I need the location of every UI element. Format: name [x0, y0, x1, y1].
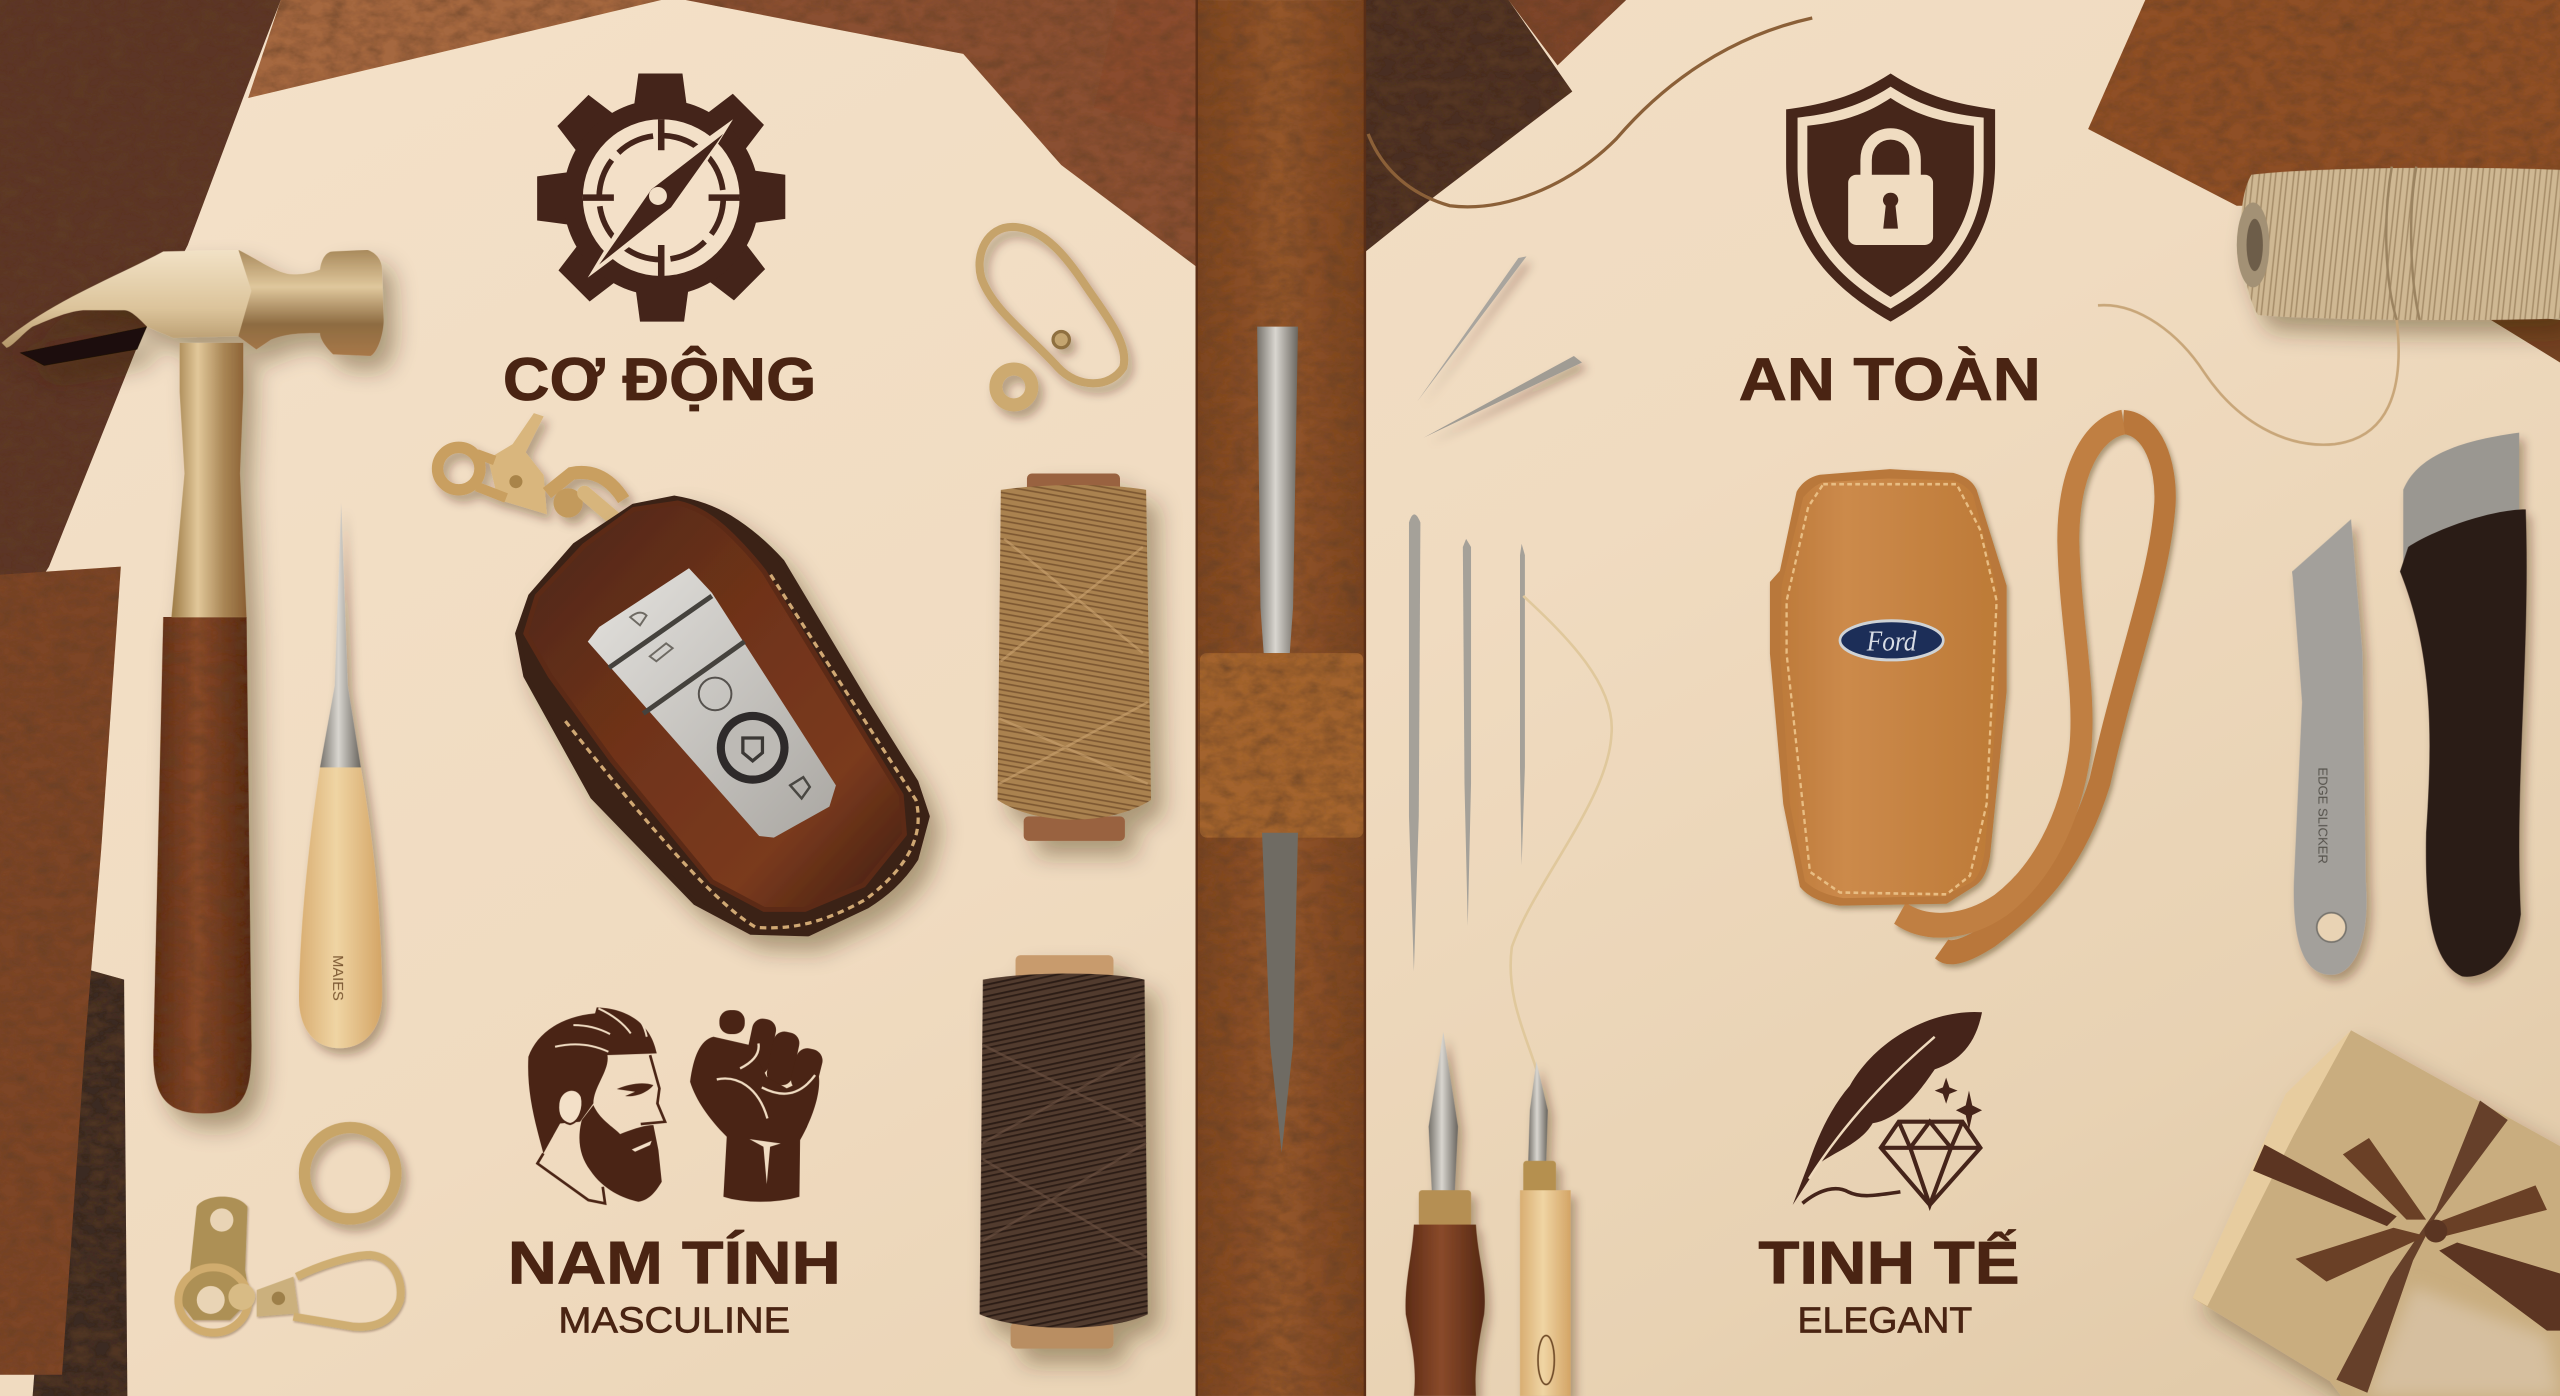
brass carabiner and washer	[980, 227, 1124, 405]
fob silver key panel	[588, 568, 836, 838]
box lighter side strip	[2193, 1030, 2351, 1306]
hammer poll neck and face	[238, 250, 384, 356]
gear teeth	[537, 74, 785, 322]
box	[2193, 1030, 2560, 1396]
feather	[1793, 1012, 1982, 1205]
leather scraps: left side	[0, 0, 661, 1396]
heading: AN TOÀN: AN TOÀN	[1739, 345, 2041, 413]
face profile	[641, 1055, 665, 1124]
strap loop	[1200, 653, 1363, 838]
tool: lower awl in strap	[1262, 833, 1298, 1153]
ribbon bow	[2296, 1138, 2547, 1282]
leather scraps: top right	[2088, 0, 2560, 362]
heading: TINH TẾ: TINH TẾ	[1758, 1228, 2020, 1296]
leather scraps: top centre	[686, 0, 1626, 269]
fob round lock button	[717, 712, 789, 784]
steel needles vertical	[1409, 514, 1525, 971]
shield inner	[1807, 98, 1974, 297]
edge slicker tool: EDGE SLICKER	[2315, 767, 2330, 864]
hammer brass ferrule	[171, 343, 247, 617]
loose beige thread	[2098, 305, 2399, 445]
fingers	[719, 1010, 745, 1034]
palm and wrist	[690, 1037, 819, 1202]
brass ring	[304, 1128, 396, 1219]
ink squiggle	[1802, 1189, 1900, 1203]
thin leather thread top	[1368, 18, 1812, 207]
hair highlights	[555, 1008, 647, 1052]
stitching awl	[299, 503, 382, 1048]
hair	[528, 1007, 657, 1153]
brown leather key fob	[518, 498, 927, 934]
blurred lower right area	[2367, 1287, 2560, 1396]
heading: CƠ ĐỘNG: CƠ ĐỘNG	[503, 345, 816, 413]
tan Ford key fob with strap: Ford	[1866, 625, 1917, 657]
brass lobster clasp	[438, 413, 653, 554]
shield cream band	[1798, 87, 1984, 309]
hammer handle wood	[153, 617, 251, 1114]
tan waxed thread spool	[998, 474, 1151, 841]
stitching awl: MAIES	[329, 955, 345, 1001]
ribbon strands	[2336, 1100, 2508, 1393]
icon: bearded man profile	[528, 1007, 665, 1203]
compass needle	[588, 119, 733, 278]
Ford oval badge	[1840, 621, 1943, 660]
hammer head and claw	[2, 250, 251, 348]
tool: chisel in strap	[1257, 327, 1298, 653]
neck outline	[537, 1153, 605, 1203]
dark waxed thread spool	[980, 955, 1148, 1349]
tan Ford key fob with strap	[1770, 422, 2165, 952]
fob stitching	[563, 575, 918, 928]
fob outer border	[518, 498, 927, 934]
heading: NAM TÍNH: NAM TÍNH	[508, 1228, 841, 1296]
ear	[558, 1090, 582, 1124]
beige thread spool	[2237, 167, 2560, 320]
shadow under claw	[20, 327, 147, 366]
fob lanyard right strand	[1942, 422, 2165, 952]
sparkles	[1935, 1078, 1982, 1130]
fob stitching	[1787, 484, 1997, 894]
fob lanyard left strand	[1900, 422, 2123, 925]
edge slicker tool	[2292, 519, 2366, 975]
fob leather top	[1780, 479, 1998, 898]
shield outer	[1786, 74, 1995, 322]
mouth highlight	[632, 1141, 652, 1152]
central leather strap	[1197, 0, 1365, 1396]
kraft gift box with ribbon	[2193, 1030, 2560, 1396]
diamond	[1881, 1122, 1980, 1205]
hammer	[2, 250, 384, 1114]
icon: feather and diamond	[1793, 1012, 1982, 1205]
fob body	[1770, 469, 2007, 906]
leather knife	[2400, 433, 2527, 977]
waxed thread from needle	[1511, 596, 1612, 1069]
beard	[579, 1105, 662, 1202]
subheading: ELEGANT: ELEGANT	[1798, 1299, 1972, 1340]
subheading: MASCULINE: MASCULINE	[558, 1299, 790, 1340]
eye and brow	[617, 1083, 653, 1096]
icon: gear with compass	[537, 74, 785, 322]
creases	[717, 1043, 815, 1118]
compass dial	[583, 119, 740, 276]
icon: raised fist	[690, 1010, 825, 1202]
brass swivel clasp with tab	[178, 1197, 401, 1333]
bottom tools: round knife and awl	[1405, 1032, 1571, 1396]
icon: shield with padlock	[1786, 74, 1995, 322]
steel needles diagonal	[1417, 256, 1582, 438]
padlock	[1866, 134, 1915, 176]
fob leather	[526, 503, 904, 909]
